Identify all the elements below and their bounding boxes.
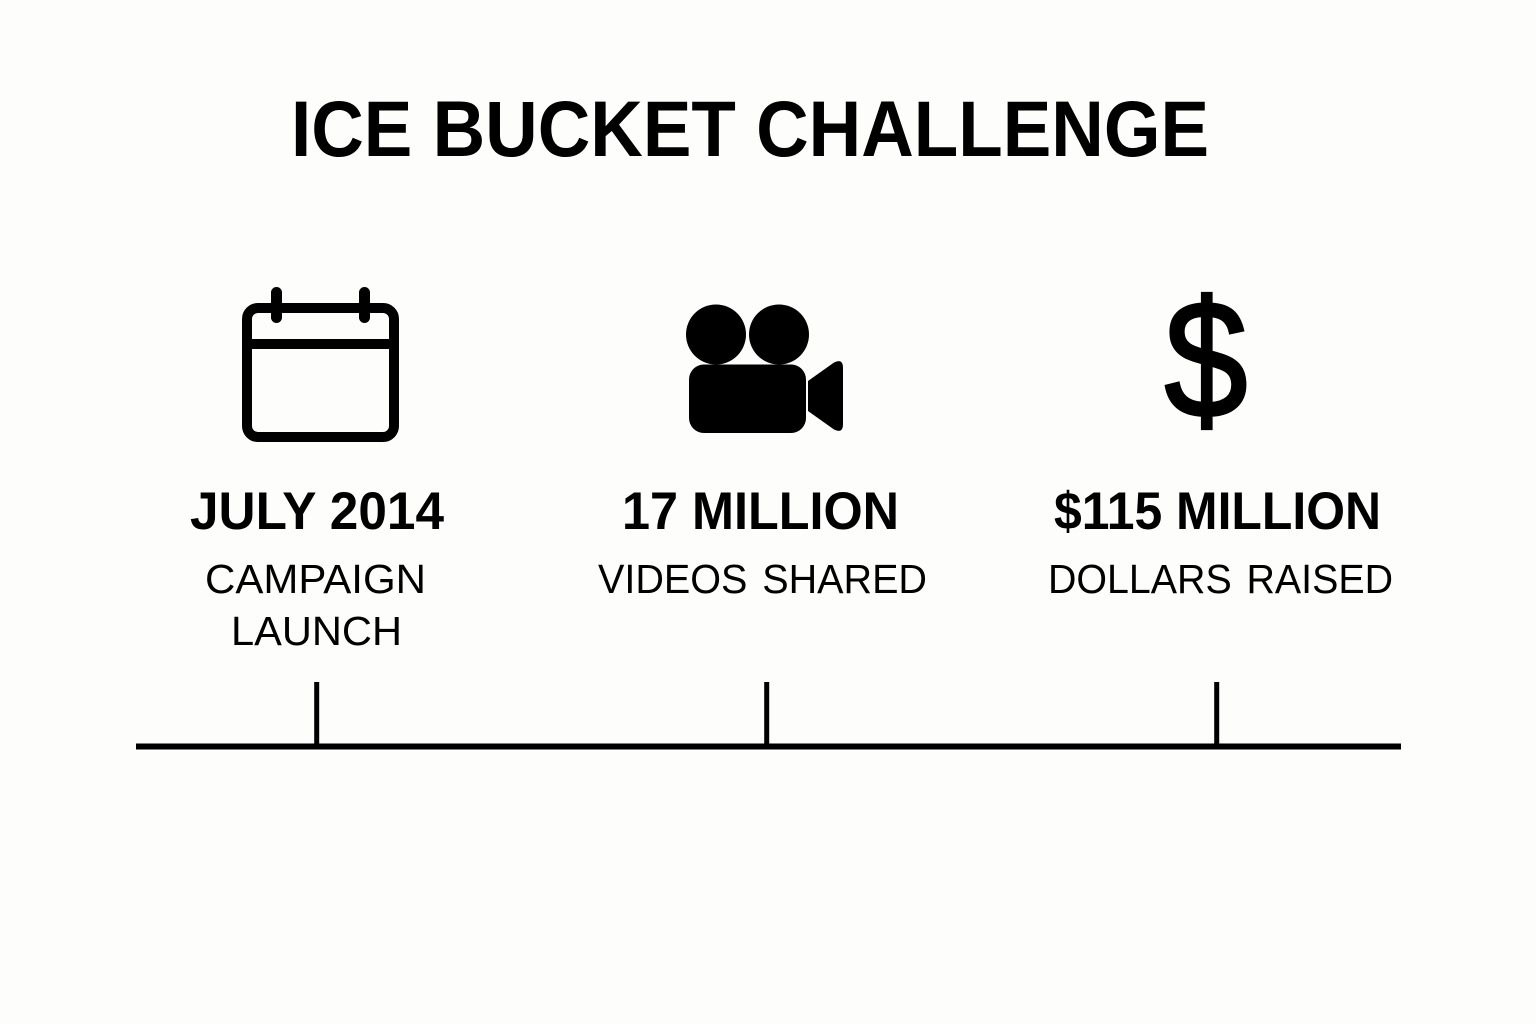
timeline [136,682,1401,746]
milestone: videos shared [598,482,927,602]
figure: 17 million: 17 MILLION [622,482,899,541]
label: campaign launch: LAUNCH [231,608,402,654]
figure: $115 million: $115 MILLION [1054,482,1381,541]
label: campaign launch [205,556,426,654]
milestone: campaign launch [190,482,444,654]
figure: July 2014: JULY 2014 [190,482,444,541]
icon: dollar sign: $ [1164,267,1248,453]
label: campaign launch: CAMPAIGN [205,556,426,602]
icon: calendar [247,292,394,437]
label: dollars raised: DOLLARS RAISED [1048,556,1393,602]
label: videos shared: VIDEOS SHARED [598,556,927,602]
icon: video camera [686,304,843,433]
milestone: dollars raised [1048,482,1393,602]
title: ICE BUCKET CHALLENGE [291,84,1209,173]
